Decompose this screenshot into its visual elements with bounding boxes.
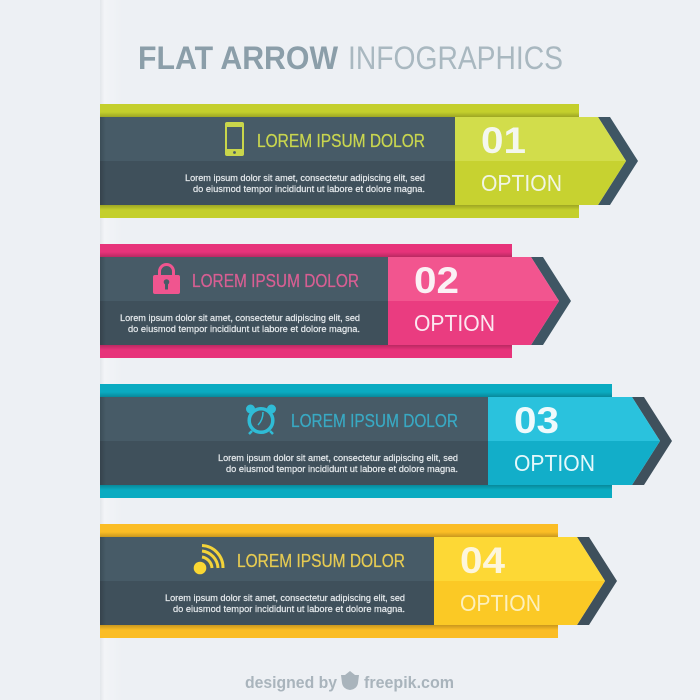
- heading: LOREM IPSUM DOLOR: [192, 271, 359, 291]
- body text: do eiusmod tempor incididunt ut labore et dolore magna.: [193, 184, 425, 194]
- icon: smartphone: [225, 122, 244, 156]
- arrow outline: [632, 397, 672, 485]
- option label: OPTION: [460, 590, 541, 616]
- body text: do eiusmod tempor incididunt ut labore et dolore magna.: [173, 604, 405, 614]
- body text: Lorem ipsum dolor sit amet, consectetur adipiscing elit, sed: [218, 453, 458, 463]
- body text: Lorem ipsum dolor sit amet, consectetur adipiscing elit, sed: [165, 593, 405, 603]
- icon: padlock: [153, 264, 180, 294]
- icon: alarm clock: [246, 404, 276, 434]
- title: FLAT ARROW: [138, 40, 339, 76]
- footer credit: [245, 671, 454, 692]
- panel: banner 01: [100, 104, 638, 218]
- title: INFOGRAPHICS: [348, 40, 563, 76]
- dark panel: [100, 117, 455, 205]
- number: 04: [460, 540, 505, 581]
- footer credit: designed by: [245, 674, 338, 692]
- heading: LOREM IPSUM DOLOR: [237, 551, 405, 571]
- body text: do eiusmod tempor incididunt ut labore et dolore magna.: [226, 464, 458, 474]
- option label: OPTION: [414, 310, 495, 336]
- arrow outline: [531, 257, 571, 345]
- body text: Lorem ipsum dolor sit amet, consectetur adipiscing elit, sed: [185, 173, 425, 183]
- title: [138, 40, 563, 76]
- footer credit: freepik.com: [364, 674, 454, 692]
- panel: banner 02: [100, 244, 571, 358]
- body text: [218, 453, 458, 474]
- panel: banner 04: [100, 524, 617, 638]
- arrow body: [455, 117, 626, 205]
- heading: LOREM IPSUM DOLOR: [291, 411, 458, 431]
- back band: [100, 244, 512, 358]
- back band: [100, 524, 558, 638]
- number: 02: [414, 260, 459, 301]
- body text: [185, 173, 425, 194]
- option label: OPTION: [481, 170, 562, 196]
- heading: LOREM IPSUM DOLOR: [257, 131, 425, 151]
- arrow outline: [598, 117, 638, 205]
- arrow body: [488, 397, 660, 485]
- arrow body: [434, 537, 605, 625]
- icon: freepik logo: [341, 671, 359, 690]
- panel: banner 03: [100, 384, 672, 498]
- number: 01: [481, 120, 526, 161]
- body text: Lorem ipsum dolor sit amet, consectetur adipiscing elit, sed: [120, 313, 360, 323]
- number: 03: [514, 400, 559, 441]
- body text: [165, 593, 405, 614]
- arrow body: [388, 257, 559, 345]
- option label: OPTION: [514, 450, 595, 476]
- back band: [100, 104, 579, 218]
- back band: [100, 384, 612, 498]
- dark panel: [100, 537, 434, 625]
- arrow outline: [577, 537, 617, 625]
- body text: do eiusmod tempor incididunt ut labore et dolore magna.: [128, 324, 360, 334]
- dark panel: [100, 257, 388, 345]
- body text: [120, 313, 360, 334]
- dark panel: [100, 397, 488, 485]
- icon: rss signal: [194, 546, 223, 574]
